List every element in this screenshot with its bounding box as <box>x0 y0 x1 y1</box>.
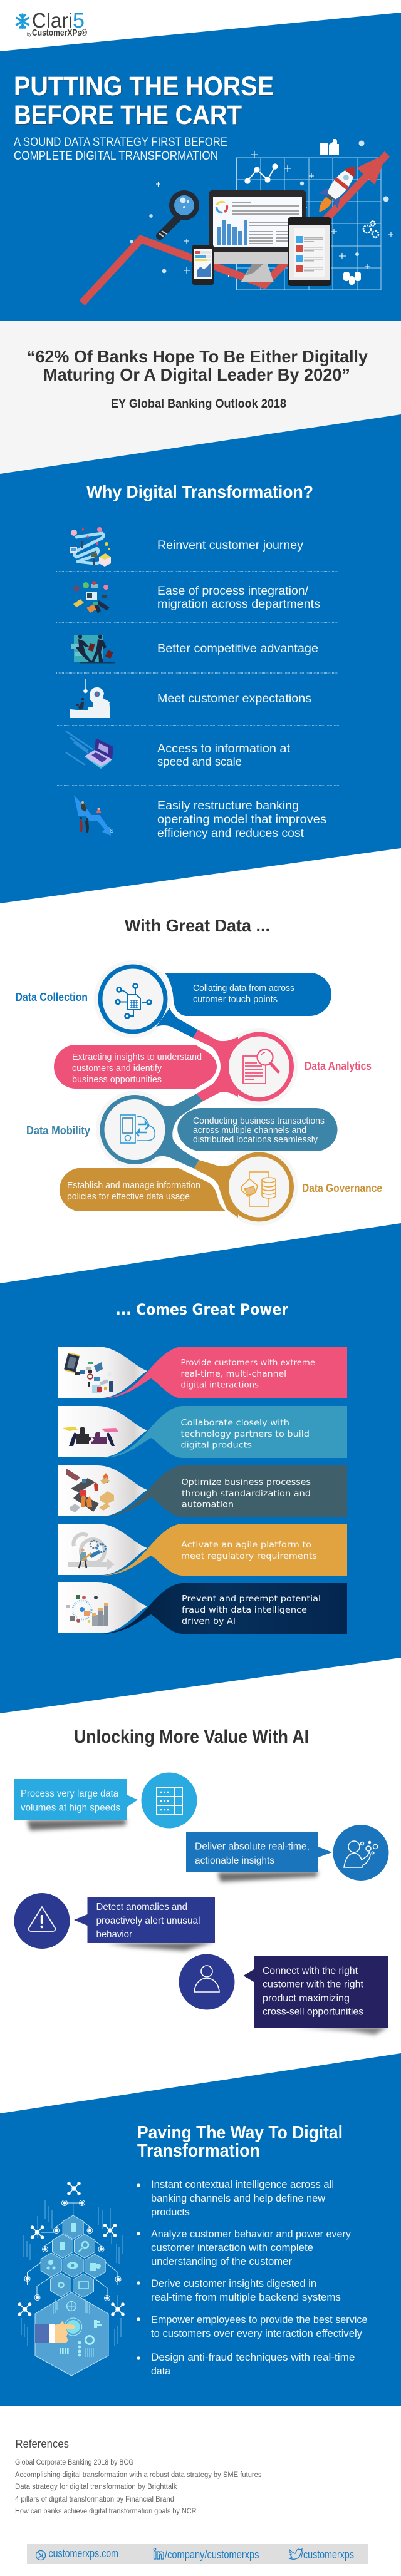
ribbon: agile platform: meet regulatory requirements <box>181 1551 317 1561</box>
bullet list: real-time from multiple backend systems <box>151 2292 341 2303</box>
step: data governance <box>60 1152 382 1222</box>
step: data collection <box>15 964 331 1038</box>
quote source: EY Global Banking Outlook 2018 <box>111 398 286 411</box>
callout: connect with customer: product maximizing <box>263 1993 350 2004</box>
icon: twitter bird <box>289 2549 302 2559</box>
references: Data strategy for digital transformation by Brighttalk <box>15 2483 177 2491</box>
callout: detect anomalies: Detect anomalies and <box>96 1902 187 1912</box>
callout: detect anomalies: proactively alert unusual <box>96 1916 200 1926</box>
callout: connect with customer: customer with the right <box>263 1979 364 1989</box>
bullet list: banking channels and help define new <box>151 2193 325 2204</box>
quote text: Maturing Or A Digital Leader By 2020” <box>43 365 350 384</box>
ribbon: real-time interactions <box>58 1347 347 1398</box>
red growth arrow <box>82 153 387 303</box>
footer links bar: /company/customerxps <box>165 2548 259 2561</box>
heading: Paving The Way To Digital <box>137 2123 343 2143</box>
icon: phone <box>192 245 214 285</box>
icon: desktop monitor <box>209 190 306 282</box>
bullet list: Design anti-fraud techniques with real-time <box>151 2352 355 2363</box>
ribbon: real-time interactions: real-time, multi-channel <box>180 1369 286 1379</box>
step: data governance: Data Governance <box>302 1182 382 1194</box>
ribbon: agile platform <box>58 1524 347 1576</box>
step: data mobility: distributed locations seamlessly <box>193 1134 318 1145</box>
step: data analytics: business opportunities <box>72 1074 162 1085</box>
icon: gears <box>363 222 378 237</box>
logo: Clari5 by CustomerXPs: Clari <box>32 9 73 32</box>
row: process integration: Ease of process integration/ <box>157 585 309 598</box>
logo: Clari5 by CustomerXPs: CustomerXPs® <box>32 28 87 38</box>
footer links bar: /customerxps <box>301 2548 354 2561</box>
icon: linkedin <box>154 2548 164 2559</box>
icon: people <box>343 272 361 285</box>
row: process integration <box>73 581 320 613</box>
icon: pointing hand <box>35 2321 75 2343</box>
icon: database and box <box>241 1172 276 1206</box>
quote text: “62% Of Banks Hope To Be Either Digitally <box>27 347 368 366</box>
icon: person with bubbles <box>344 1841 377 1867</box>
step: data analytics <box>54 1030 372 1102</box>
ribbon: real-time interactions: digital interactions <box>180 1380 259 1390</box>
icon: report magnifier <box>243 1049 278 1084</box>
section: quote panel <box>0 321 401 474</box>
references: References <box>15 2438 69 2450</box>
step: data governance: policies for effective data usage <box>67 1191 190 1202</box>
bullet list: data <box>151 2366 171 2377</box>
heading: Why Digital Transformation? <box>86 482 313 501</box>
row: restructure operating model: Easily restructure banking <box>157 799 299 813</box>
footer links bar: customerxps.com <box>49 2547 118 2560</box>
row: process integration: migration across departments <box>157 598 320 611</box>
heading: Transformation <box>137 2141 260 2161</box>
icon: head on stairs: $ <box>102 703 104 707</box>
bullet list: Analyze customer behavior and power every <box>151 2229 352 2240</box>
step: data analytics: Data Analytics <box>305 1060 372 1072</box>
icon: connected devices <box>73 581 110 613</box>
row: competitive advantage <box>71 635 318 664</box>
callout: detect anomalies <box>14 1893 215 1951</box>
row: competitive advantage: Better competitive advantage <box>157 642 318 655</box>
row: restructure operating model <box>74 795 326 840</box>
step: data mobility: Data Mobility <box>26 1124 90 1137</box>
ribbon: fraud prevention: Prevent and preempt potential <box>182 1594 321 1604</box>
ribbon: fraud prevention: fraud with data intelligence <box>182 1605 307 1615</box>
icon: chip and devices <box>64 1352 113 1393</box>
row: information at speed: speed and scale <box>157 756 242 769</box>
bullet list: customer interaction with complete <box>151 2242 313 2254</box>
row: information at speed: Access to information at <box>157 742 291 756</box>
line mini chart <box>245 164 278 183</box>
heading: With Great Data ... <box>125 916 270 935</box>
callout: process large data <box>14 1773 197 1830</box>
section: hero header <box>0 0 401 321</box>
section: paving the way <box>0 2053 401 2406</box>
icon: running businessmen <box>71 635 115 664</box>
section: unlocking more value with AI <box>14 1727 388 2035</box>
icon: phone and cloud <box>120 1115 155 1143</box>
references: 4 pillars of digital transformation by Financial Brand <box>15 2496 174 2503</box>
icon: rocket <box>310 159 365 220</box>
bullet list: Instant contextual intelligence across all <box>151 2179 334 2190</box>
ribbon: agile platform: Activate an agile platform to <box>181 1540 311 1550</box>
icon: winding journey <box>70 527 111 567</box>
ribbon: process automation: through standardization and <box>182 1489 311 1499</box>
subtitle <box>14 136 227 163</box>
icon: magnifying glass <box>159 190 199 237</box>
icon: speeding laptop <box>66 731 113 769</box>
step: data mobility: Conducting business transactions <box>193 1116 325 1126</box>
bullet list: to customers over every interaction effectively <box>151 2328 363 2339</box>
callout: real-time insights: actionable insights <box>195 1855 274 1866</box>
step: data analytics: customers and identify <box>72 1063 162 1074</box>
row: customer expectations: Meet customer expectations <box>157 692 311 706</box>
bullet list: products <box>151 2207 190 2218</box>
icon: falling cost arrow: $ <box>110 828 113 834</box>
ribbon: technology partners: digital products <box>180 1440 252 1450</box>
icon: data table <box>157 1788 182 1814</box>
ribbon: real-time interactions: Provide customers with extreme <box>180 1358 315 1368</box>
ribbon: technology partners: Collaborate closely with <box>180 1418 289 1428</box>
references: Global Corporate Banking 2018 by BCG <box>15 2459 134 2466</box>
icon: globe <box>36 2550 45 2560</box>
illustration: rising chart with devices <box>82 139 393 303</box>
bullet list: understanding of the customer <box>151 2256 293 2267</box>
references: How can banks achieve digital transformation goals by NCR <box>15 2508 197 2515</box>
icon: puzzle partners <box>63 1427 118 1446</box>
icon: tablet <box>288 217 331 286</box>
subtitle: COMPLETE DIGITAL TRANSFORMATION <box>14 150 218 163</box>
quote text <box>27 347 368 384</box>
logo: Clari5 by CustomerXPs: 5 <box>73 9 85 32</box>
bullet list <box>137 2179 367 2377</box>
ribbon: fraud prevention: driven by AI <box>182 1616 236 1626</box>
footer links bar <box>27 2544 368 2564</box>
bullet list: Derive customer insights digested in <box>151 2278 316 2289</box>
callout: connect with customer: Connect with the right <box>263 1966 358 1976</box>
ribbon: technology partners: technology partners to build <box>180 1429 310 1439</box>
heading: Unlocking More Value With AI <box>74 1727 309 1747</box>
icon: person <box>194 1966 219 1992</box>
heading: ... Comes Great Power <box>115 1301 288 1318</box>
icon: falling cost arrow <box>74 795 113 836</box>
section: with great data <box>15 916 382 1226</box>
step: data mobility <box>26 1094 337 1169</box>
step: data mobility: across multiple channels and <box>193 1125 306 1136</box>
title: BEFORE THE CART <box>14 100 242 130</box>
ribbon: process automation <box>58 1465 347 1517</box>
section: why digital transformation <box>0 414 401 903</box>
ribbon: fraud prevention <box>58 1582 347 1634</box>
title: PUTTING THE HORSE <box>14 71 274 101</box>
logo: Clari5 by CustomerXPs: by <box>27 33 32 37</box>
bullet list: Empower employees to provide the best service <box>151 2314 367 2326</box>
logo: Clari5 by CustomerXPs <box>16 9 87 38</box>
row: restructure operating model: efficiency and reduces cost <box>157 827 305 840</box>
row: information at speed <box>66 731 291 769</box>
step: data collection: Collating data from across <box>193 983 294 993</box>
row: customer expectations <box>70 678 311 718</box>
subtitle: A SOUND DATA STRATEGY FIRST BEFORE <box>14 136 227 149</box>
section: comes great power <box>0 1223 401 1713</box>
ribbon: process automation: automation <box>182 1500 234 1510</box>
step: data collection: cutomer touch points <box>193 994 278 1005</box>
references: Accomplishing digital transformation with a robust data strategy by SME futures <box>15 2471 262 2479</box>
callout: connect with customer <box>179 1954 388 2035</box>
icon: factory conveyor <box>66 1469 114 1512</box>
ribbon: process automation: Optimize business processes <box>182 1477 311 1487</box>
icon: analytics dashboard <box>66 1595 108 1626</box>
icon: thumbs up <box>320 139 339 155</box>
icon: snowflake <box>16 14 29 28</box>
callout: connect with customer: cross-sell opportunities <box>263 2007 363 2017</box>
heading <box>137 2123 343 2161</box>
icon: warning triangle <box>29 1907 55 1931</box>
callout: process large data: volumes at high speeds <box>21 1803 120 1813</box>
callout: real-time insights: Deliver absolute real-time, <box>195 1842 310 1852</box>
row: reinvent customer journey: Reinvent customer journey <box>157 539 304 552</box>
title <box>14 71 274 130</box>
illustration: hexagon network with hand <box>19 2182 124 2376</box>
ribbon: technology partners <box>58 1406 347 1458</box>
callout: real-time insights <box>186 1825 388 1882</box>
callout: detect anomalies: behavior <box>96 1929 133 1940</box>
step: data collection: Data Collection <box>15 991 88 1003</box>
row: reinvent customer journey <box>70 527 304 567</box>
callout: process large data: Process very large data <box>21 1788 118 1799</box>
step: data analytics: Extracting insights to understand <box>72 1052 202 1062</box>
sub-icons on big hexagon <box>53 2299 102 2357</box>
icon: gears and person <box>68 1534 115 1571</box>
row: restructure operating model: operating model that improves <box>157 813 326 826</box>
icon: data nodes document <box>115 984 152 1018</box>
icon: head on stairs <box>70 678 110 718</box>
step: data governance: Establish and manage information <box>67 1180 200 1191</box>
references <box>15 2438 262 2515</box>
